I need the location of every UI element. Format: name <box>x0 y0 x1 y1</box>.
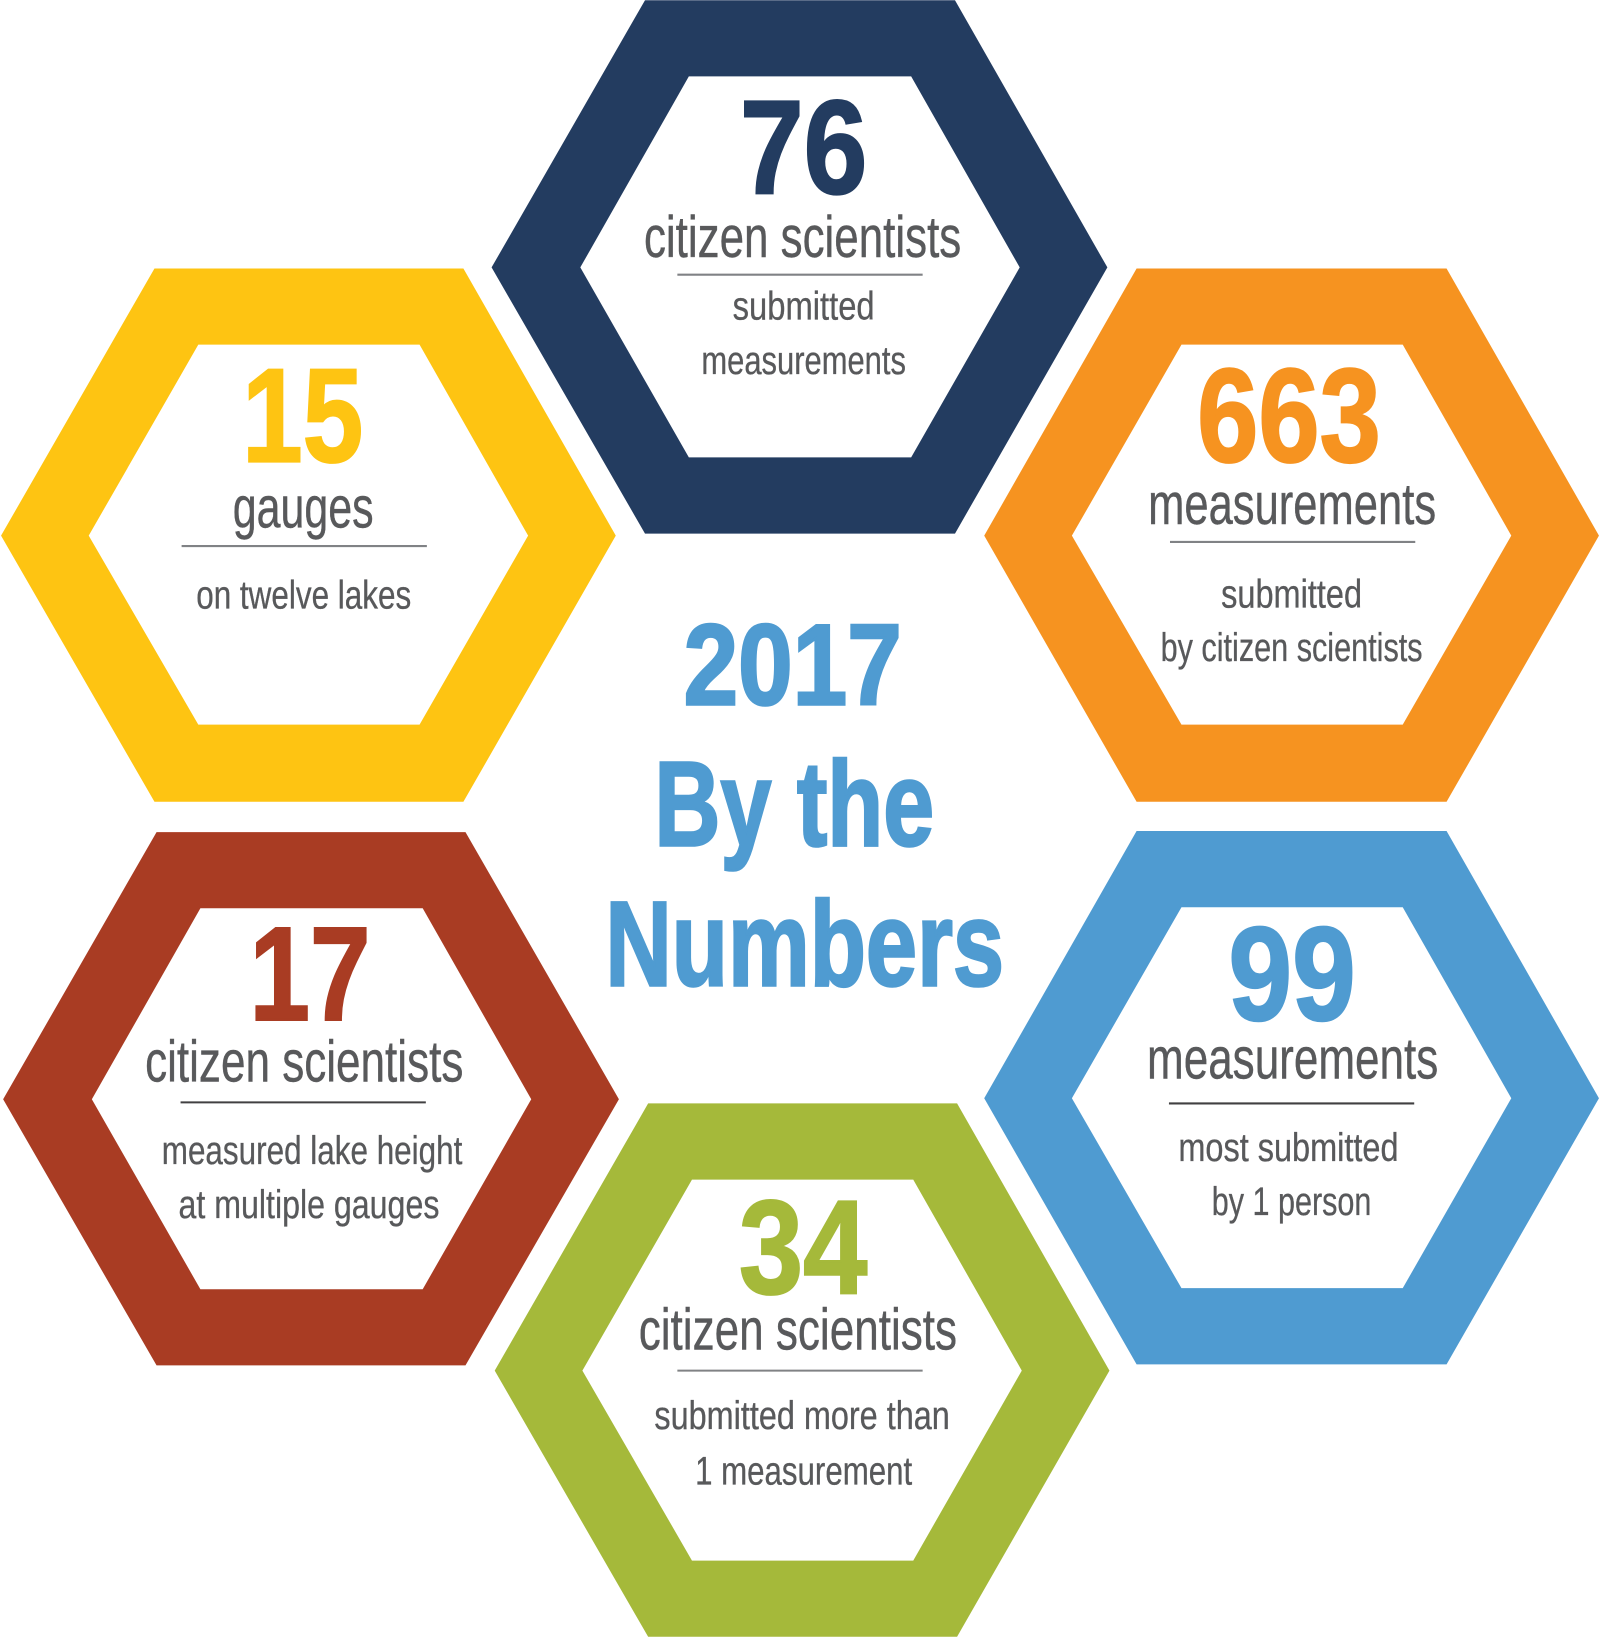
hexagon ring: navy <box>492 0 1107 534</box>
hexagon ring: red <box>3 832 619 1365</box>
hexagon ring: green <box>495 1103 1109 1637</box>
number: 17: 17 <box>249 900 371 1049</box>
title: 2017 By the Numbers: By the <box>654 736 934 872</box>
description: most submitted by 1 person <box>1178 1126 1399 1224</box>
panel: 76 citizen scientists (navy hexagon) <box>492 0 1107 534</box>
heading: measurements: measurements <box>1148 472 1436 537</box>
heading: citizen scientists: citizen scientists <box>644 205 961 270</box>
description: submitted by citizen scientists: by citizen scientists <box>1161 626 1423 670</box>
title: 2017 By the Numbers <box>605 602 1004 1011</box>
heading: citizen scientists: citizen scientists <box>639 1298 957 1363</box>
heading: gauges: gauges <box>233 475 374 540</box>
number: 76: 76 <box>740 73 867 222</box>
number: 99: 99 <box>1228 900 1356 1049</box>
description: submitted measurements <box>701 285 906 383</box>
heading: measurements: measurements <box>1147 1026 1438 1091</box>
hexagon ring: orange <box>984 268 1599 802</box>
description: measured lake height at multiple gauges: measured lake height <box>162 1129 462 1173</box>
panel: 99 measurements (blue hexagon) <box>984 831 1599 1364</box>
description: submitted more than 1 measurement <box>654 1394 950 1493</box>
hexagon ring: blue <box>984 831 1599 1364</box>
number: 34: 34 <box>739 1173 867 1322</box>
description: most submitted by 1 person: by 1 person <box>1212 1180 1371 1224</box>
description: submitted by citizen scientists: submitted <box>1221 573 1362 617</box>
panel: 663 measurements (orange hexagon) <box>984 268 1599 802</box>
description: submitted by citizen scientists <box>1161 573 1423 670</box>
panel: 17 citizen scientists (red hexagon) <box>3 832 619 1365</box>
number: 663: 663 <box>1197 342 1381 491</box>
description: submitted measurements: submitted <box>733 285 875 329</box>
description: submitted more than 1 measurement: submitted more than <box>654 1394 950 1438</box>
title: 2017 By the Numbers: Numbers <box>605 875 1004 1011</box>
description: most submitted by 1 person: most submitted <box>1178 1126 1399 1170</box>
panel: 34 citizen scientists (green hexagon) <box>495 1103 1109 1637</box>
description: on twelve lakes: on twelve lakes <box>196 574 411 618</box>
description: measured lake height at multiple gauges: at multiple gauges <box>178 1183 439 1227</box>
description: submitted more than 1 measurement: 1 measurement <box>695 1449 912 1493</box>
description: submitted measurements: measurements <box>701 339 906 383</box>
description: measured lake height at multiple gauges <box>162 1129 462 1227</box>
panel: 15 gauges (yellow hexagon) <box>1 268 616 802</box>
number: 15: 15 <box>242 342 363 491</box>
heading: citizen scientists: citizen scientists <box>145 1030 463 1095</box>
title: 2017 By the Numbers: 2017 <box>684 602 902 730</box>
hexagon ring: yellow <box>1 268 616 802</box>
